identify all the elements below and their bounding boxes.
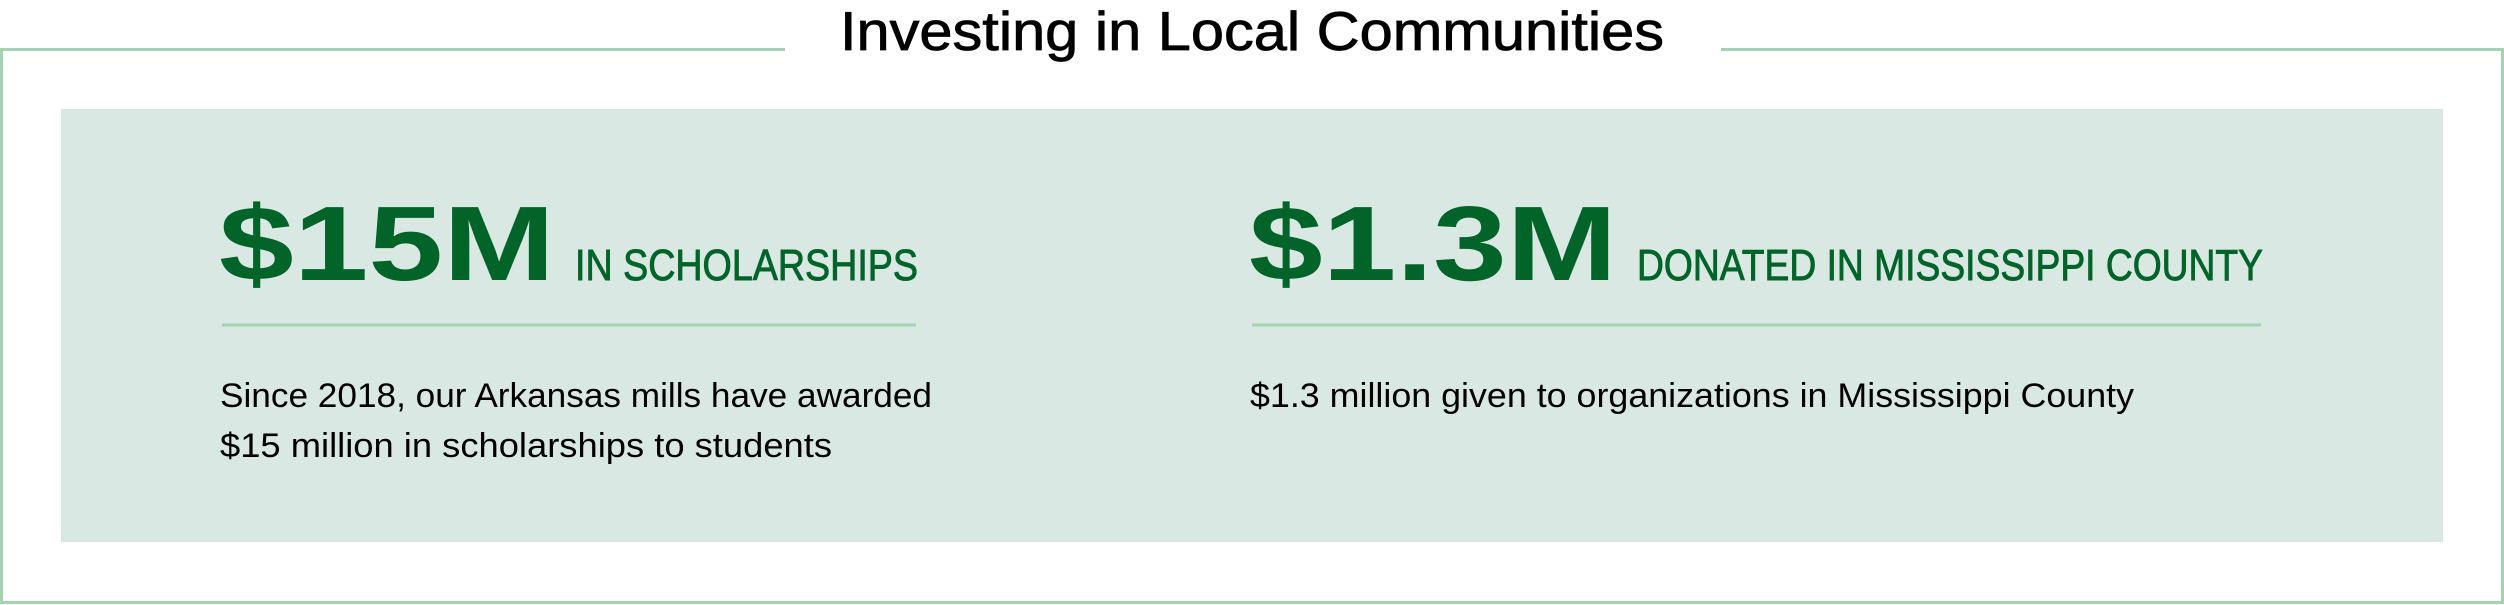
stat: Mississippi County donations [1249,185,2263,415]
panel: community investments [61,109,2443,542]
description: scholarships: $15 million in scholarships to students [220,427,832,465]
big number: $1.3M: $1.3M [1249,185,1617,303]
rule [222,324,916,326]
rule [1252,324,2261,326]
label: donated in Mississippi County: DONATED IN MISSISSIPPI COUNTY [1637,241,2263,290]
big number: $15M: $15M [219,185,555,303]
title: Investing in Local Communities [840,0,1664,62]
description: scholarships [220,377,932,465]
label: in scholarships: IN SCHOLARSHIPS [575,241,918,290]
panel background [61,109,2443,542]
description: donations: $1.3 million given to organizations in Mississippi County [1250,377,2134,415]
stat: scholarships [219,185,932,465]
description: scholarships: Since 2018, our Arkansas mills have awarded [220,377,932,415]
